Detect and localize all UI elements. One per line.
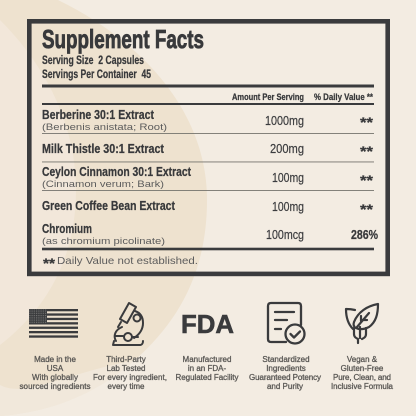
column header: daily value: % Daily Value ** <box>314 92 373 103</box>
badge: fda: in an FDA- <box>188 364 226 373</box>
footnote: Daily Value not established. <box>57 255 198 267</box>
badge: vegan and gluten-free <box>331 304 394 391</box>
badge: third-party lab tested: For every ingredient, <box>93 373 167 382</box>
badge: vegan and gluten-free: Inclusive Formula <box>331 382 394 391</box>
panel: supplement facts <box>29 21 388 274</box>
badge: vegan and gluten-free: Gluten-Free <box>341 364 384 373</box>
row: berberine: ** <box>360 114 374 130</box>
icon: fork with leaf <box>346 304 378 343</box>
badge: third-party lab tested: Third-Party <box>106 355 146 364</box>
badge: made in the usa: With globally <box>32 373 78 382</box>
row: green coffee bean: 100mg <box>272 199 304 214</box>
badge: fda <box>176 309 238 382</box>
badge: standardized ingredients: Standardized <box>262 355 310 364</box>
row: chromium: (as chromium picolinate) <box>42 236 165 247</box>
badge: standardized ingredients: Guaranteed Potency <box>249 373 321 382</box>
row: berberine: Berberine 30:1 Extract <box>42 107 155 122</box>
icon: microscope <box>113 303 143 345</box>
row: chromium: 286% <box>351 227 378 242</box>
row: ceylon cinnamon: (Cinnamon verum; Bark) <box>42 179 164 190</box>
badge: made in the usa: Made in the <box>34 355 76 364</box>
serving size: Serving Size 2 Capsules <box>42 55 144 67</box>
icon: fda logo: FDA <box>181 309 234 339</box>
row: ceylon cinnamon: Ceylon Cinnamon 30:1 Extract <box>42 164 192 179</box>
title: Supplement Facts <box>42 24 204 54</box>
row: ceylon cinnamon <box>42 164 374 190</box>
badge: made in the usa: USA <box>47 364 64 373</box>
badge: made in the usa <box>20 309 90 391</box>
row: milk thistle <box>42 141 374 159</box>
row: green coffee bean <box>42 198 374 217</box>
column header: amount per serving: Amount Per Serving <box>232 92 304 103</box>
row: ceylon cinnamon: ** <box>360 172 374 188</box>
icon: document with check <box>268 303 304 344</box>
badge: vegan and gluten-free: Vegan & <box>347 355 378 364</box>
badge: standardized ingredients: and Purity <box>267 382 303 391</box>
row: ceylon cinnamon: 100mg <box>272 170 304 185</box>
footnote: ** <box>43 255 56 271</box>
badge: standardized ingredients <box>249 303 321 391</box>
panel frame <box>29 21 388 274</box>
row: chromium: 100mcg <box>266 227 304 242</box>
badge: vegan and gluten-free: Pure, Clean, and <box>333 373 391 382</box>
footnote <box>43 255 198 271</box>
row: berberine: (Berbenis anistata; Root) <box>42 122 167 133</box>
badge: third-party lab tested: every time <box>108 382 145 391</box>
servings per container: Servings Per Container 45 <box>42 69 151 81</box>
row: berberine: 1000mg <box>265 113 304 128</box>
row: chromium <box>42 221 378 247</box>
row: milk thistle: Milk Thistle 30:1 Extract <box>42 141 165 156</box>
row: green coffee bean: Green Coffee Bean Extract <box>42 198 176 213</box>
badge: made in the usa: sourced ingredients <box>20 382 90 391</box>
row: milk thistle: 200mg <box>270 141 304 156</box>
badge: standardized ingredients: Ingredients <box>266 364 306 373</box>
badge: third-party lab tested <box>93 303 167 391</box>
row: berberine <box>42 107 374 133</box>
badge: fda: Regulated Facility <box>176 373 238 382</box>
icon: american flag <box>29 309 78 338</box>
row: milk thistle: ** <box>360 143 374 159</box>
row: chromium: Chromium <box>42 221 92 236</box>
badge: fda: Manufactured <box>183 355 231 364</box>
badge: third-party lab tested: Lab Tested <box>106 364 146 373</box>
row: green coffee bean: ** <box>360 201 374 217</box>
